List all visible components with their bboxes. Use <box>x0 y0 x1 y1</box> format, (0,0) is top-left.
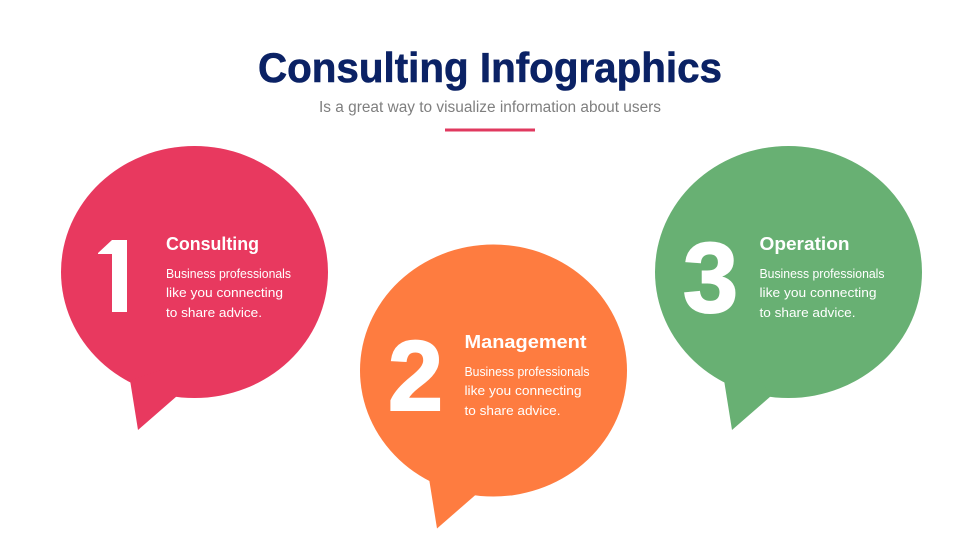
number 1: 1 <box>91 222 147 334</box>
infographic <box>61 51 922 528</box>
body text: to share advice. <box>464 403 560 418</box>
body text: Business professionals <box>760 266 884 281</box>
heading: Operation <box>760 233 850 254</box>
panel: operation <box>655 146 922 430</box>
heading: Consulting <box>166 233 259 254</box>
accent underline <box>445 128 535 132</box>
body text: Business professionals <box>464 364 590 379</box>
body text <box>166 266 291 320</box>
number 3: 3 <box>683 222 738 333</box>
body text: like you connecting <box>464 383 582 398</box>
body text <box>760 266 884 320</box>
speech bubble <box>360 244 627 528</box>
body text: like you connecting <box>760 285 876 300</box>
number 2: 2 <box>388 320 443 431</box>
body text: Business professionals <box>166 266 291 281</box>
speech bubble <box>61 146 328 430</box>
panel: management <box>360 244 627 528</box>
body text: to share advice. <box>166 305 262 320</box>
body text: like you connecting <box>166 285 283 300</box>
subtitle: Is a great way to visualize information about users <box>319 99 661 116</box>
panel: consulting <box>61 146 328 430</box>
heading: Management <box>464 331 586 352</box>
body text <box>464 364 590 418</box>
title: Consulting Infographics <box>258 44 722 91</box>
body text: to share advice. <box>760 305 856 320</box>
speech bubble <box>655 146 922 430</box>
